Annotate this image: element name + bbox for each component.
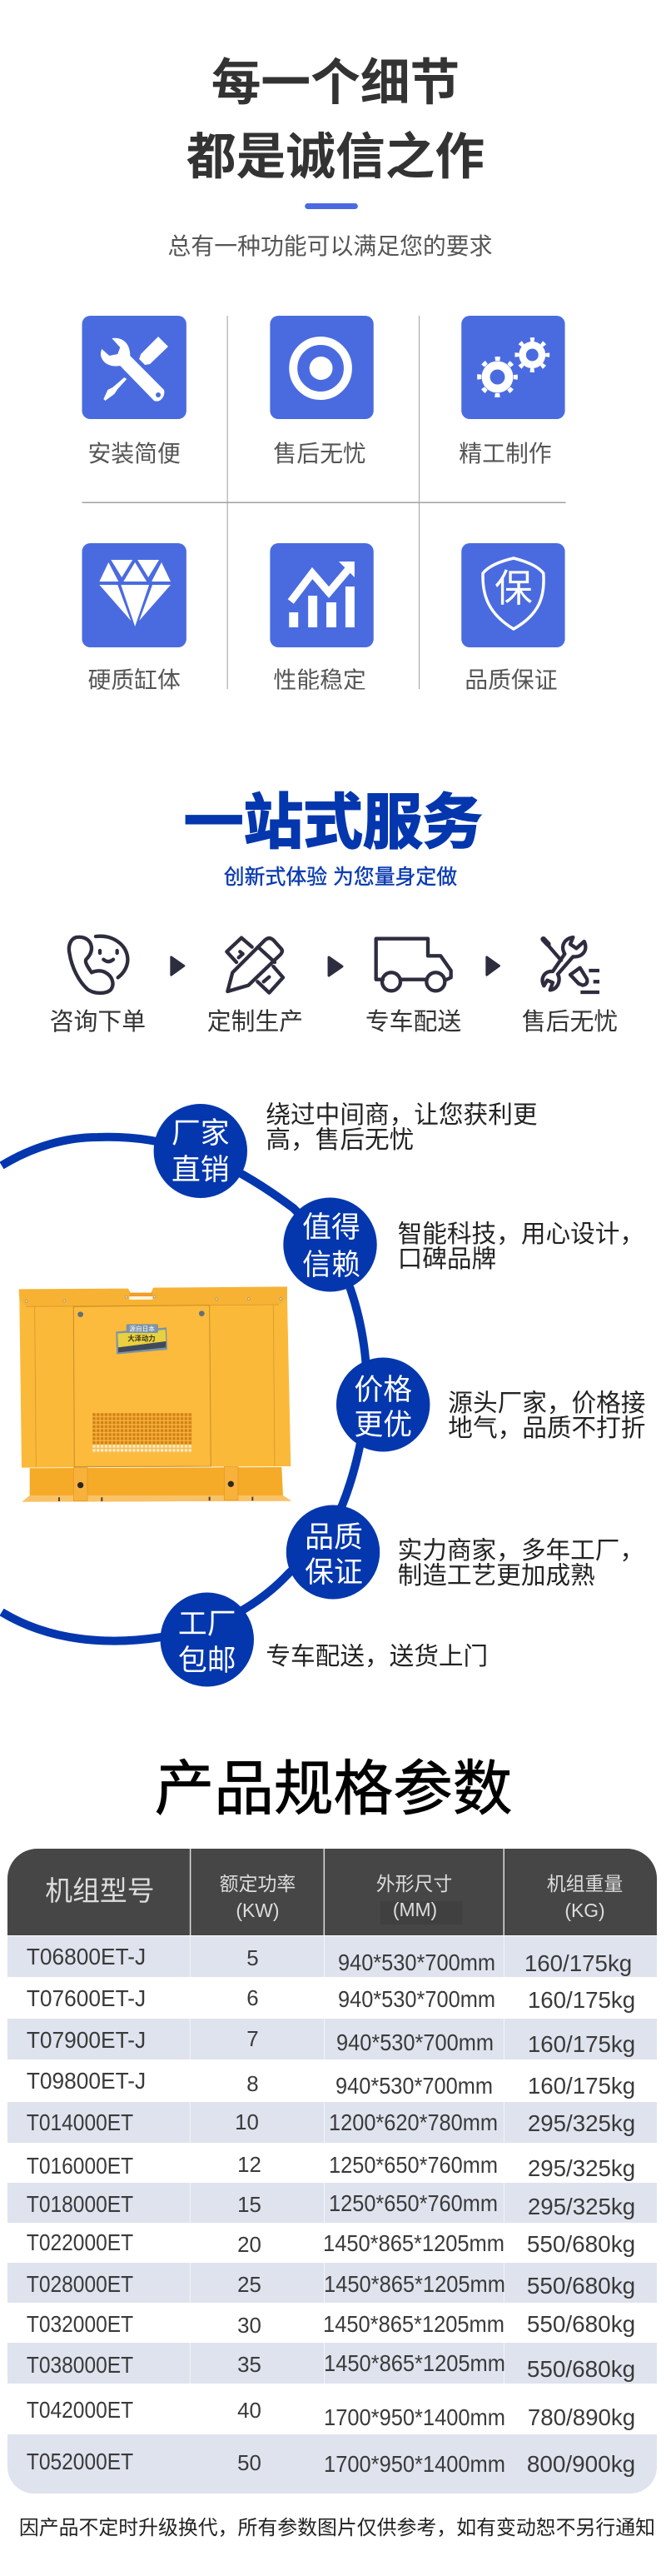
row T07900ET-J: 940*530*700mm — [336, 2029, 494, 2055]
icon: target — [270, 316, 374, 419]
label: hard cylinder: 硬质缸体 — [87, 667, 181, 693]
row T018000ET: T018000ET — [27, 2191, 133, 2217]
node: trustworthy: 值得 — [302, 1211, 360, 1244]
node: trustworthy: 信赖 — [302, 1249, 360, 1281]
step labels: 专车配送 — [365, 1009, 461, 1036]
heading: every detail: 都是诚信之作 — [186, 129, 485, 185]
row T042000ET — [27, 2397, 635, 2430]
text: trustworthy — [398, 1221, 644, 1273]
row T032000ET: 1450*865*1205mm — [323, 2311, 504, 2337]
table header: 额定功率 — [220, 1873, 296, 1895]
row T032000ET: 550/680kg — [527, 2311, 635, 2337]
icon: chart — [270, 543, 374, 647]
table header: (KG) — [564, 1900, 605, 1921]
row T09800ET-J: 160/175kg — [528, 2073, 635, 2099]
accent bar — [305, 203, 358, 209]
row T022000ET: 550/680kg — [527, 2231, 635, 2257]
row T09800ET-J: 940*530*700mm — [335, 2073, 493, 2099]
row T028000ET: 1450*865*1205mm — [324, 2271, 505, 2297]
text: better price — [448, 1390, 645, 1442]
row T016000ET: 1250*650*760mm — [329, 2152, 498, 2178]
node: quality guarantee: 保证 — [305, 1556, 363, 1589]
text: factory direct — [266, 1101, 537, 1154]
text: factory direct: 绕过中间商，让您获利更 — [266, 1101, 537, 1129]
row T022000ET — [27, 2229, 635, 2257]
table: specs — [7, 1849, 657, 2494]
icon: pencil and ruler — [226, 938, 283, 993]
row T038000ET: T038000ET — [27, 2352, 133, 2378]
row T016000ET: 295/325kg — [528, 2155, 635, 2181]
row T014000ET — [27, 2109, 635, 2136]
row T032000ET: 30 — [237, 2314, 261, 2338]
node: factory direct — [154, 1104, 247, 1198]
node: free shipping: 包邮 — [178, 1645, 236, 1677]
subtitle: 总有一种功能可以满足您的要求 — [168, 233, 492, 259]
arrow 3 — [487, 957, 500, 975]
row T09800ET-J: T09800ET-J — [27, 2068, 146, 2094]
row T07900ET-J — [27, 2027, 635, 2057]
icon: tools — [82, 316, 186, 419]
text: better price: 地气，品质不打折 — [448, 1415, 645, 1442]
icon: phone — [69, 936, 127, 993]
table header: 外形尺寸 — [376, 1873, 452, 1895]
heading: every detail: 每一个细节 — [211, 55, 460, 111]
icon: truck — [376, 939, 451, 991]
label: quality: 品质保证 — [465, 667, 558, 693]
subtitle: service: 创新式体验 为您量身定做 — [224, 866, 457, 889]
label: craft: 精工制作 — [459, 441, 552, 467]
row T018000ET: 295/325kg — [528, 2194, 635, 2219]
row T014000ET: 295/325kg — [528, 2110, 635, 2136]
row T07600ET-J — [27, 1985, 635, 2013]
row T06800ET-J — [27, 1944, 632, 1976]
heading: product specs: 产品规格参数 — [155, 1756, 512, 1823]
node: better price — [336, 1358, 430, 1451]
row T07600ET-J: T07600ET-J — [27, 1985, 146, 2011]
icon: gears — [461, 316, 565, 419]
row T052000ET: 50 — [237, 2452, 261, 2475]
row T028000ET: T028000ET — [27, 2271, 133, 2297]
row T022000ET: 1450*865*1205mm — [323, 2230, 504, 2256]
table header: 机组重量 — [547, 1873, 623, 1895]
row T06800ET-J: T06800ET-J — [27, 1944, 146, 1969]
table header: (KW) — [236, 1900, 280, 1921]
row T028000ET: 550/680kg — [527, 2273, 635, 2299]
row T052000ET: 800/900kg — [527, 2451, 635, 2477]
table header — [7, 1849, 657, 1935]
row T018000ET: 1250*650*760mm — [329, 2190, 498, 2216]
row T07900ET-J: 160/175kg — [528, 2031, 635, 2057]
node: factory direct: 直销 — [171, 1154, 230, 1186]
icon: diamond — [82, 543, 186, 647]
node: better price: 价格 — [354, 1374, 412, 1406]
text: better price: 源头厂家，价格接 — [448, 1390, 645, 1417]
table row backgrounds — [7, 1936, 657, 2494]
text: free shipping: 专车配送，送货上门 — [266, 1643, 488, 1670]
row T07600ET-J: 6 — [246, 1987, 259, 2010]
label: install: 安装简便 — [87, 441, 181, 467]
icon: shield: 保 — [495, 567, 533, 610]
panel: feature grid — [75, 316, 580, 696]
row T038000ET — [27, 2350, 635, 2382]
text: factory direct: 高，售后无忧 — [266, 1126, 414, 1154]
row T032000ET — [27, 2311, 635, 2338]
heading: one stop service: 一站式服务 — [184, 790, 482, 856]
curve — [2, 1137, 366, 1641]
text: trustworthy: 智能科技，用心设计， — [398, 1221, 644, 1248]
row T016000ET: T016000ET — [27, 2153, 133, 2179]
node: factory direct: 厂家 — [171, 1117, 230, 1150]
heading: every detail — [186, 55, 485, 185]
row T038000ET: 1450*865*1205mm — [324, 2350, 505, 2376]
icon: shield — [461, 543, 565, 647]
node: better price: 更优 — [354, 1409, 412, 1441]
row T042000ET: T042000ET — [27, 2397, 133, 2423]
row T022000ET: T022000ET — [27, 2229, 133, 2255]
row T052000ET — [27, 2449, 635, 2477]
row T042000ET: 1700*950*1400mm — [324, 2404, 505, 2430]
row T028000ET — [27, 2271, 635, 2299]
text: quality guarantee: 实力商家，多年工厂， — [398, 1537, 644, 1565]
product image: generator — [19, 1286, 291, 1502]
row T018000ET — [27, 2190, 635, 2219]
icon: repair tools — [543, 937, 599, 992]
arrow 1 — [171, 957, 184, 975]
row T06800ET-J: 940*530*700mm — [338, 1949, 495, 1975]
row T09800ET-J: 8 — [246, 2073, 259, 2096]
row T06800ET-J: 5 — [246, 1947, 259, 1970]
row T038000ET: 35 — [237, 2354, 261, 2377]
table header: 机组型号 — [45, 1875, 155, 1906]
row T014000ET: T014000ET — [27, 2109, 133, 2135]
row T07900ET-J: 7 — [246, 2028, 259, 2051]
step labels: 定制生产 — [207, 1009, 303, 1036]
product image: generator: 源自日本 — [129, 1325, 155, 1333]
node: quality guarantee: 品质 — [305, 1521, 363, 1554]
step labels — [50, 1009, 618, 1036]
row T022000ET: 20 — [237, 2234, 261, 2257]
text: trustworthy: 口碑品牌 — [398, 1246, 496, 1273]
node: free shipping — [161, 1593, 254, 1686]
row T014000ET: 1200*620*780mm — [329, 2109, 498, 2135]
node: quality guarantee — [286, 1505, 380, 1600]
step labels: 售后无忧 — [522, 1009, 618, 1036]
label: after sales: 售后无忧 — [273, 441, 366, 467]
footer note: 因产品不定时升级换代，所有参数图片仅供参考，如有变动恕不另行通知 — [19, 2517, 655, 2539]
row T07600ET-J: 160/175kg — [528, 1987, 635, 2013]
row T042000ET: 40 — [237, 2399, 261, 2423]
row T052000ET: T052000ET — [27, 2449, 133, 2474]
row T016000ET: 12 — [237, 2154, 261, 2177]
step labels: 咨询下单 — [50, 1009, 146, 1036]
node: trustworthy — [283, 1198, 377, 1291]
row T016000ET — [27, 2152, 635, 2181]
row T032000ET: T032000ET — [27, 2311, 133, 2337]
row T09800ET-J — [27, 2068, 635, 2099]
row T038000ET: 550/680kg — [527, 2356, 635, 2382]
node: free shipping: 工厂 — [178, 1608, 236, 1640]
row T07600ET-J: 940*530*700mm — [338, 1986, 495, 2012]
row T06800ET-J: 160/175kg — [524, 1950, 632, 1976]
text: quality guarantee — [398, 1537, 644, 1590]
product image: generator: 大泽动力 — [127, 1334, 156, 1342]
row T014000ET: 10 — [235, 2111, 259, 2134]
text: quality guarantee: 制造工艺更加成熟 — [398, 1562, 595, 1590]
row T07900ET-J: T07900ET-J — [27, 2027, 146, 2053]
arrow 2 — [329, 957, 342, 976]
row T052000ET: 1700*950*1400mm — [324, 2451, 505, 2477]
row T042000ET: 780/890kg — [528, 2404, 635, 2430]
row T018000ET: 15 — [237, 2194, 261, 2217]
table header: (MM) — [393, 1899, 437, 1920]
label: stable: 性能稳定 — [273, 667, 366, 693]
row T028000ET: 25 — [237, 2274, 261, 2297]
